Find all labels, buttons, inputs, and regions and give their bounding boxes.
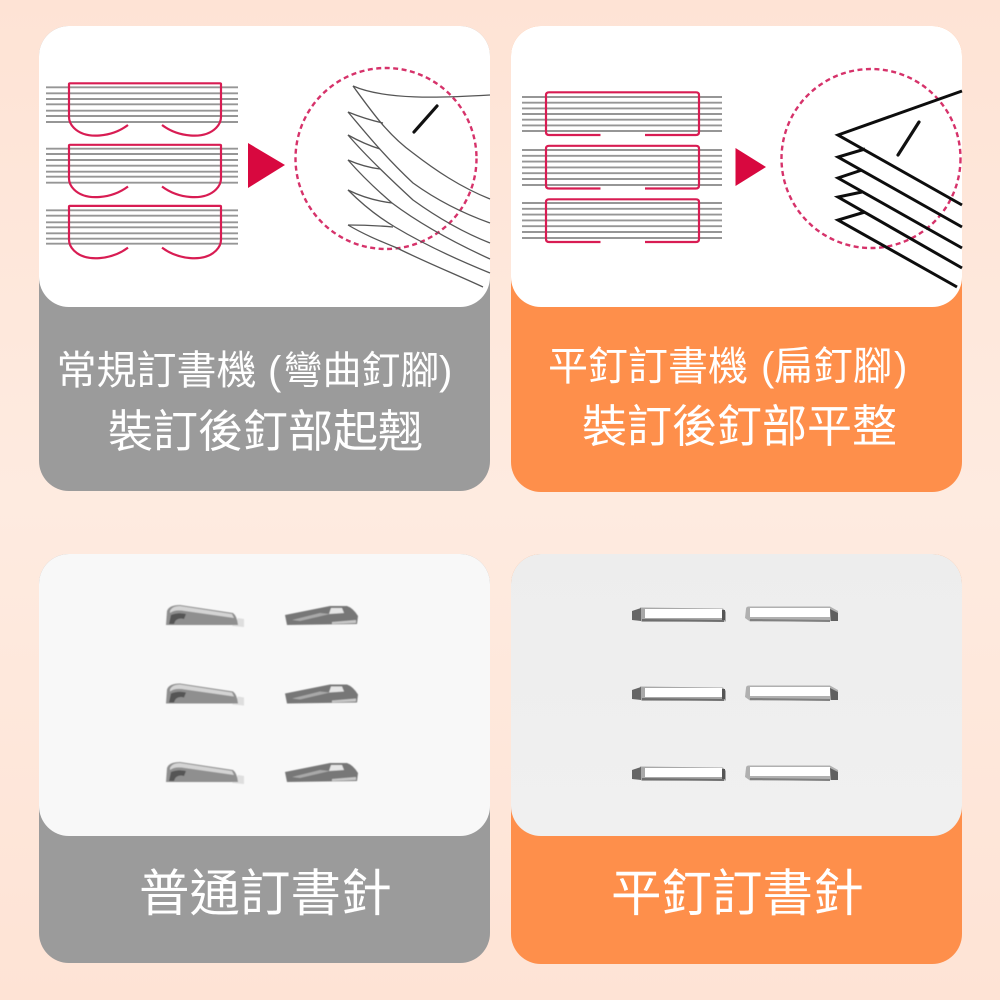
panel: regular stapler result: [39, 26, 490, 491]
diagram: paper stacks with flat staples: [522, 92, 722, 242]
caption line 1: 扁釘腳: [774, 345, 892, 389]
label: regular staples: 普通訂書針: [139, 865, 392, 922]
caption line 2: 裝訂後釘部平整: [582, 401, 897, 452]
caption line 1: (: [761, 345, 775, 389]
staple pair: row 1: [632, 606, 838, 622]
panel: flat stapler result: [511, 26, 962, 492]
staple mark: [414, 106, 437, 132]
staple pair: row 2: [632, 686, 838, 701]
staples: curved, three rows: [166, 605, 358, 784]
staples: flat, three rows: [632, 606, 838, 781]
diagram: paper stacks with curved staples: [46, 83, 238, 258]
diagram card: [511, 26, 962, 307]
staple pair: row 1: [166, 605, 358, 627]
caption line 1: 彎曲釘腳: [284, 350, 440, 393]
caption line 1: 平釘訂書機: [548, 345, 748, 389]
panel base: orange: [511, 554, 962, 964]
diagram card: [39, 26, 490, 307]
magnified circle with flat sheets: [782, 69, 962, 287]
raised sheets: [348, 86, 490, 287]
panel base: grey: [39, 554, 490, 963]
flat sheets: [838, 91, 962, 287]
panel: flat staples: [511, 554, 962, 964]
magnified circle with raised sheets: [296, 68, 490, 287]
arrow: red triangle: [248, 143, 285, 188]
staple mark: [898, 122, 919, 155]
caption: regular stapler: [56, 349, 452, 457]
dashed magnifier ring: [782, 69, 960, 248]
photo card: [39, 554, 490, 836]
caption line 1: 常規訂書機: [56, 349, 256, 393]
staple pair: row 3: [166, 762, 358, 784]
staple pair: row 2: [166, 684, 358, 706]
photo card: [511, 554, 962, 836]
panel base: grey: [39, 26, 490, 491]
panel base: orange: [511, 26, 962, 492]
caption line 1: ): [439, 349, 452, 393]
caption line 1: (: [268, 349, 282, 393]
label: flat staples: 平釘訂書針: [611, 865, 864, 922]
caption line 2: 裝訂後釘部起翹: [108, 406, 423, 457]
caption: flat stapler: [548, 345, 907, 452]
caption line 1: ): [894, 345, 907, 389]
dashed magnifier ring: [296, 68, 476, 249]
panel: regular staples: [39, 554, 490, 963]
arrow: red triangle: [736, 148, 766, 186]
staple pair: row 3: [632, 766, 838, 781]
